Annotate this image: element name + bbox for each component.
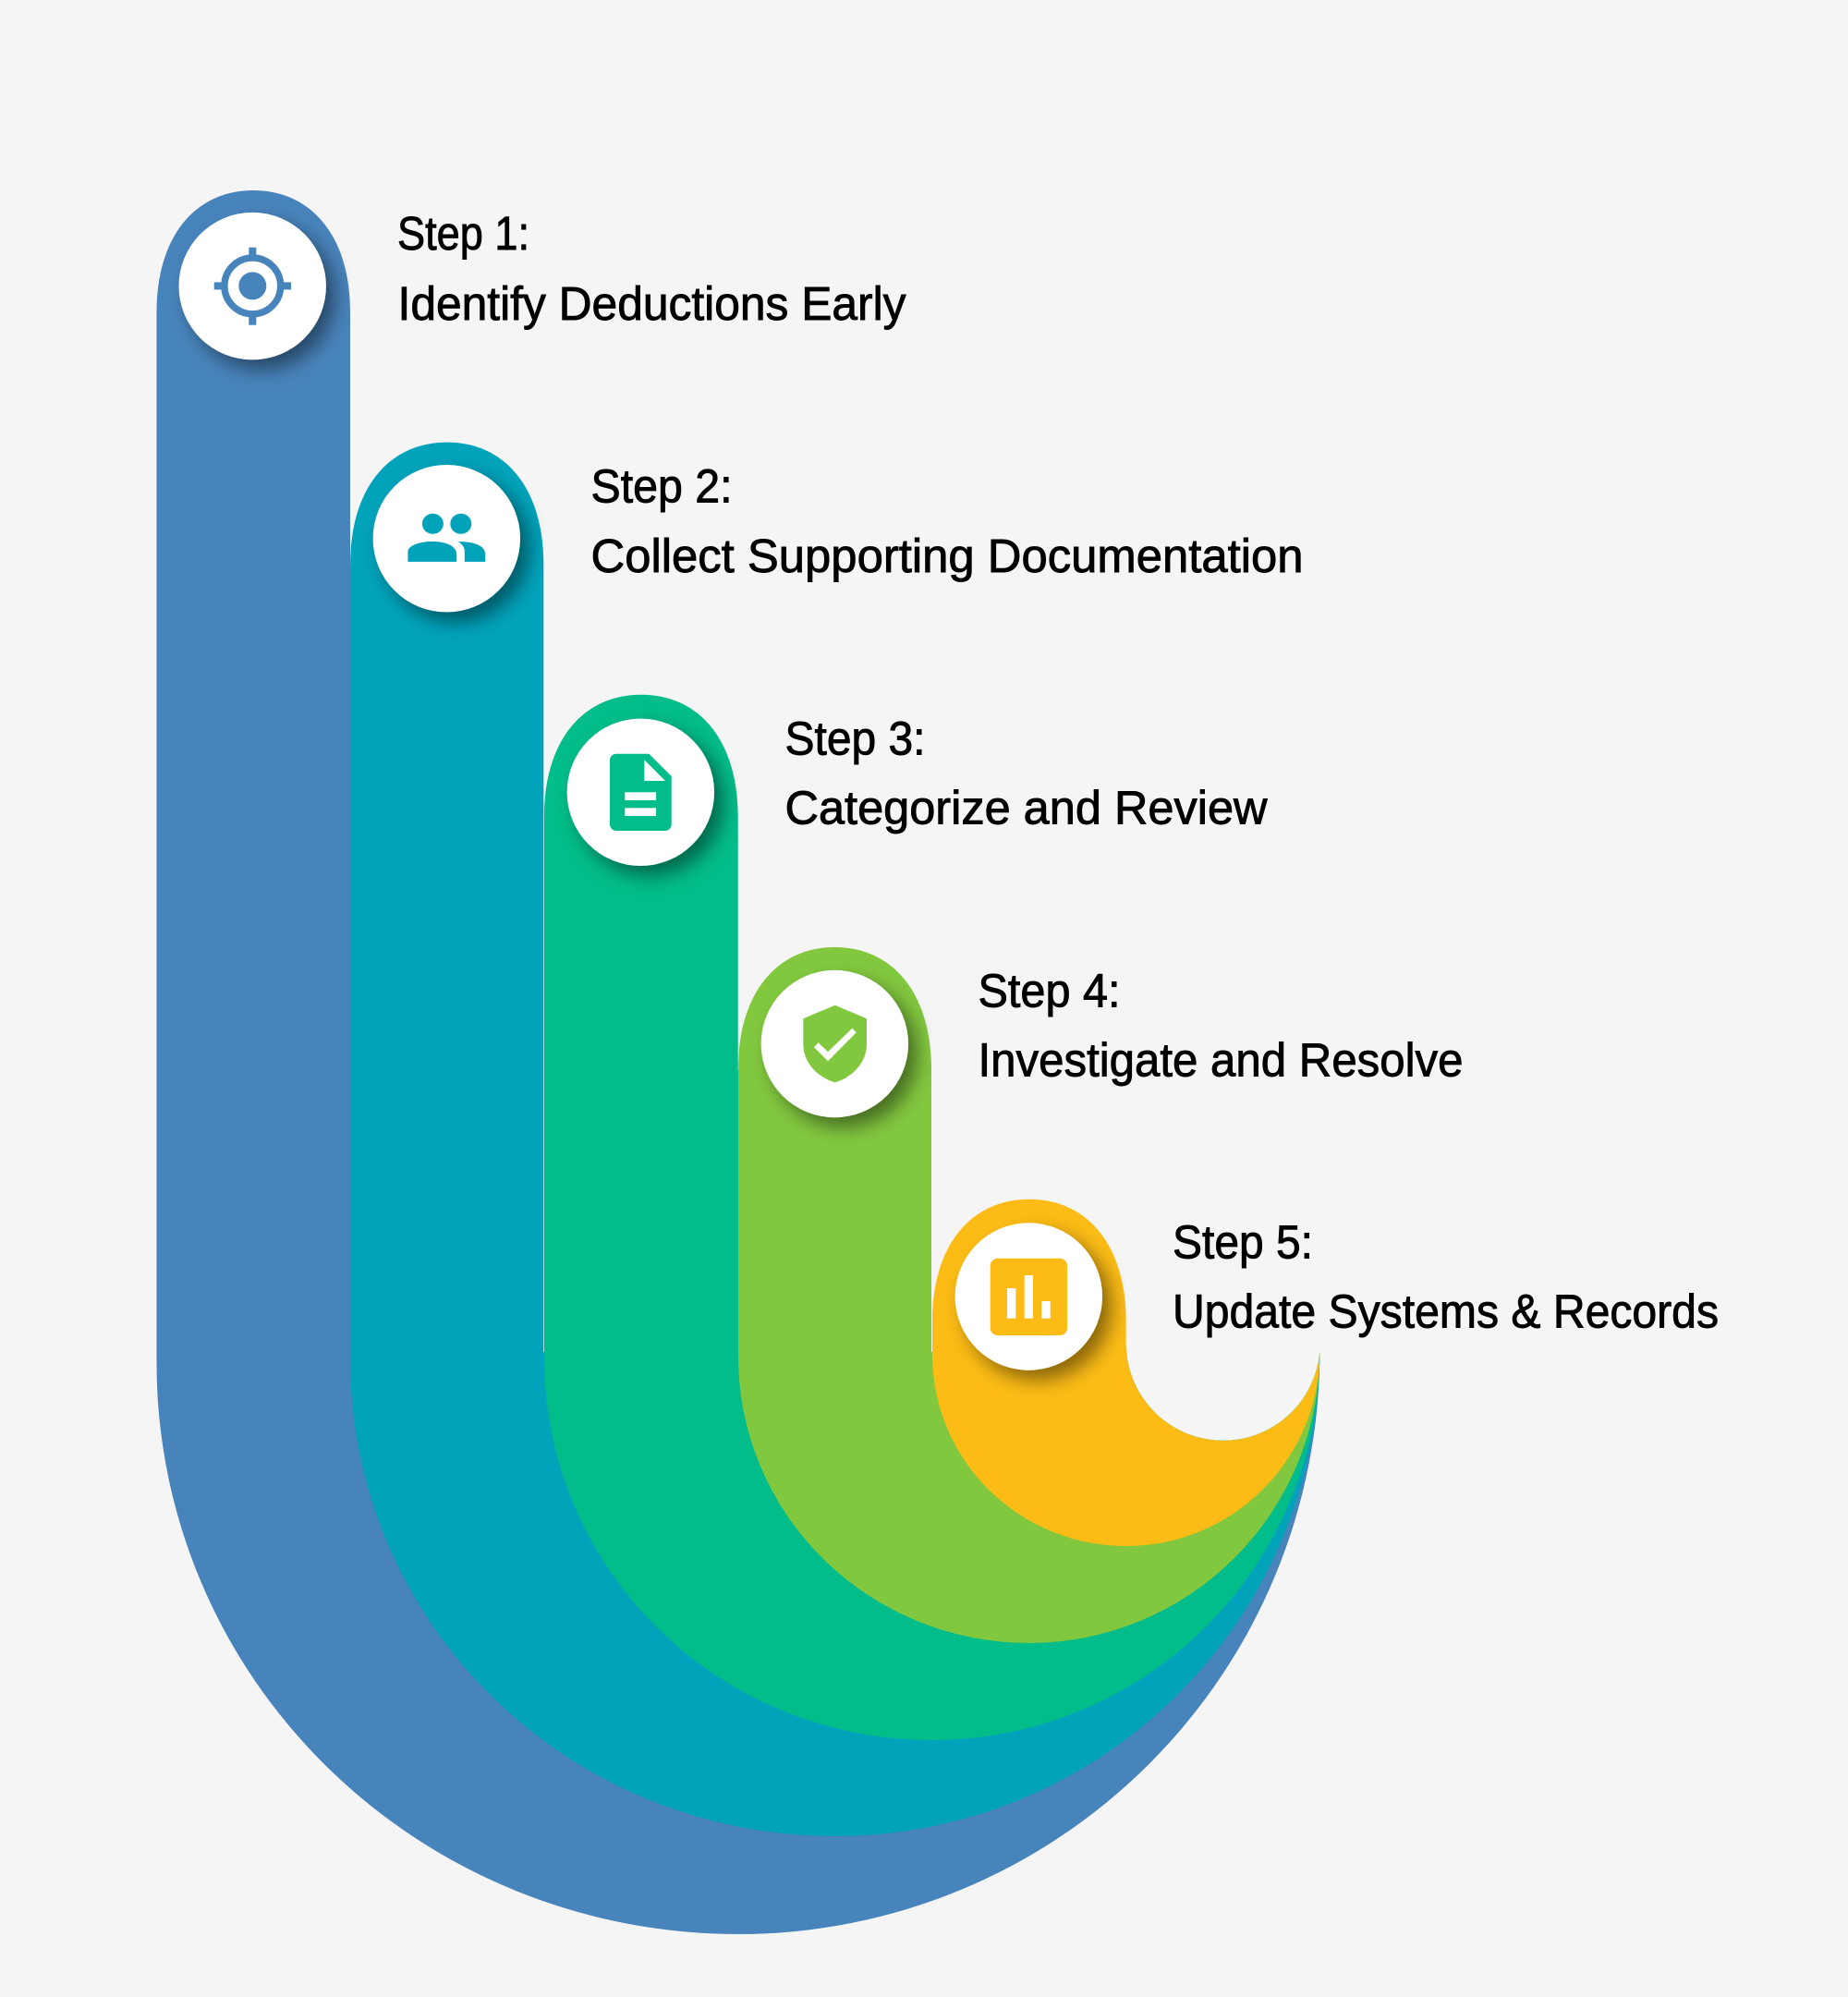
step 2 title: Collect Supporting Documentation (591, 530, 1303, 582)
step 3 (544, 695, 1319, 1740)
step 2 (350, 443, 1319, 1836)
icon: target (214, 248, 291, 325)
band: step 5 yellow (932, 1199, 1319, 1546)
step 5 title: Update Systems & Records (1173, 1285, 1719, 1338)
badge: step 4 (761, 970, 908, 1117)
step 3 label: Step 3: (785, 712, 926, 765)
icon: shield check (803, 1005, 867, 1082)
step 4 title: Investigate and Resolve (978, 1033, 1464, 1087)
band: step 2 teal (350, 443, 1319, 1836)
step 3 title: Categorize and Review (785, 782, 1268, 834)
step 1 title: Identify Deductions Early (397, 277, 906, 330)
step 2 label: Step 2: (591, 460, 732, 512)
step 5 label: Step 5: (1173, 1216, 1313, 1268)
icon: bar chart (991, 1259, 1067, 1335)
band: step 3 green (544, 695, 1319, 1740)
badge: step 1 (179, 213, 326, 359)
band: step 4 light green (738, 947, 1319, 1643)
step 5 (932, 1199, 1719, 1546)
overlap: green under light green seam (737, 1070, 738, 1352)
step 1 (157, 190, 1319, 1934)
icon: document (610, 754, 672, 831)
badge: step 2 (373, 465, 520, 612)
step 4 (738, 947, 1464, 1643)
badge: step 3 (567, 719, 714, 866)
band: step 1 blue (157, 190, 1319, 1934)
icon: people (407, 514, 485, 562)
overlap: blue under teal seam (349, 566, 351, 1352)
step 4 label: Step 4: (978, 965, 1120, 1017)
badge: step 5 (955, 1223, 1102, 1370)
step 1 label: Step 1: (397, 207, 529, 260)
